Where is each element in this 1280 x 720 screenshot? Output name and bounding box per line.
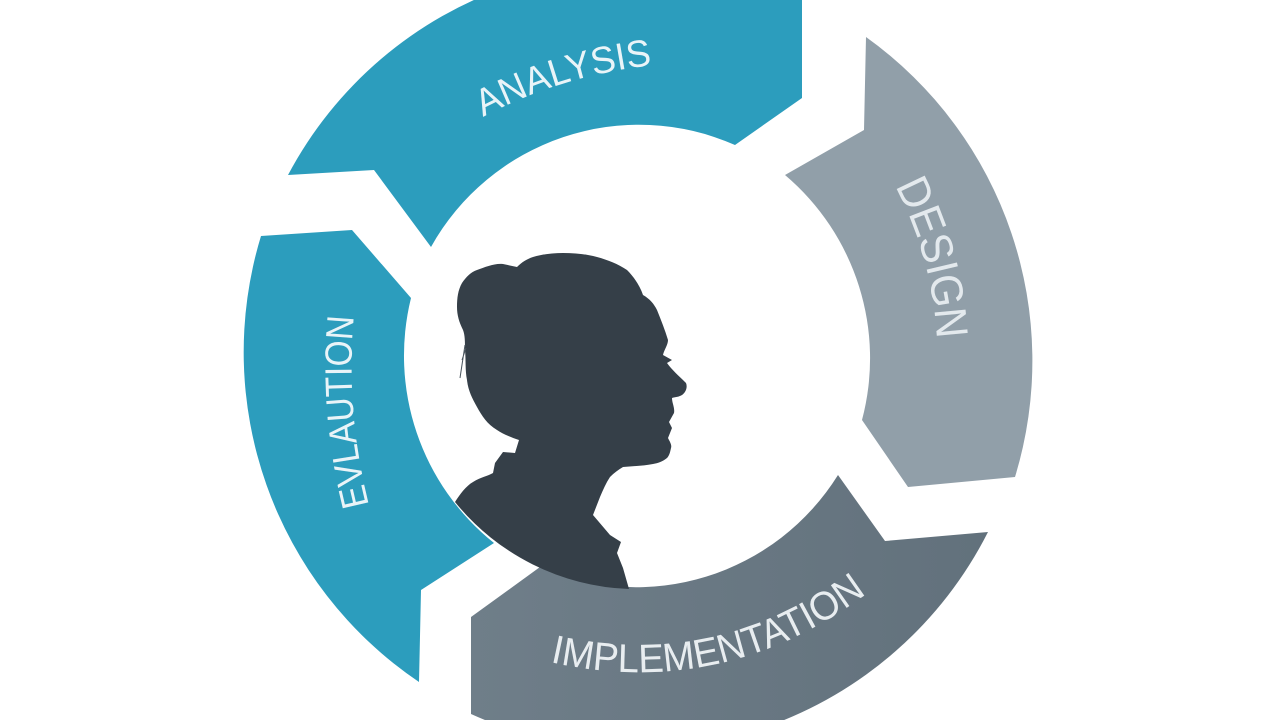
segment: evaluation <box>244 230 494 682</box>
segment: design <box>785 37 1032 487</box>
label: evaluation: EVLAUTION <box>325 317 368 508</box>
icon: head silhouette <box>455 253 687 589</box>
label: analysis: ANALYSIS <box>480 40 650 117</box>
label: implementation: IMPLEMENTATION <box>554 573 864 672</box>
segment: analysis <box>288 0 802 247</box>
segment: implementation <box>471 475 988 720</box>
label: design: DESIGN <box>896 176 968 336</box>
